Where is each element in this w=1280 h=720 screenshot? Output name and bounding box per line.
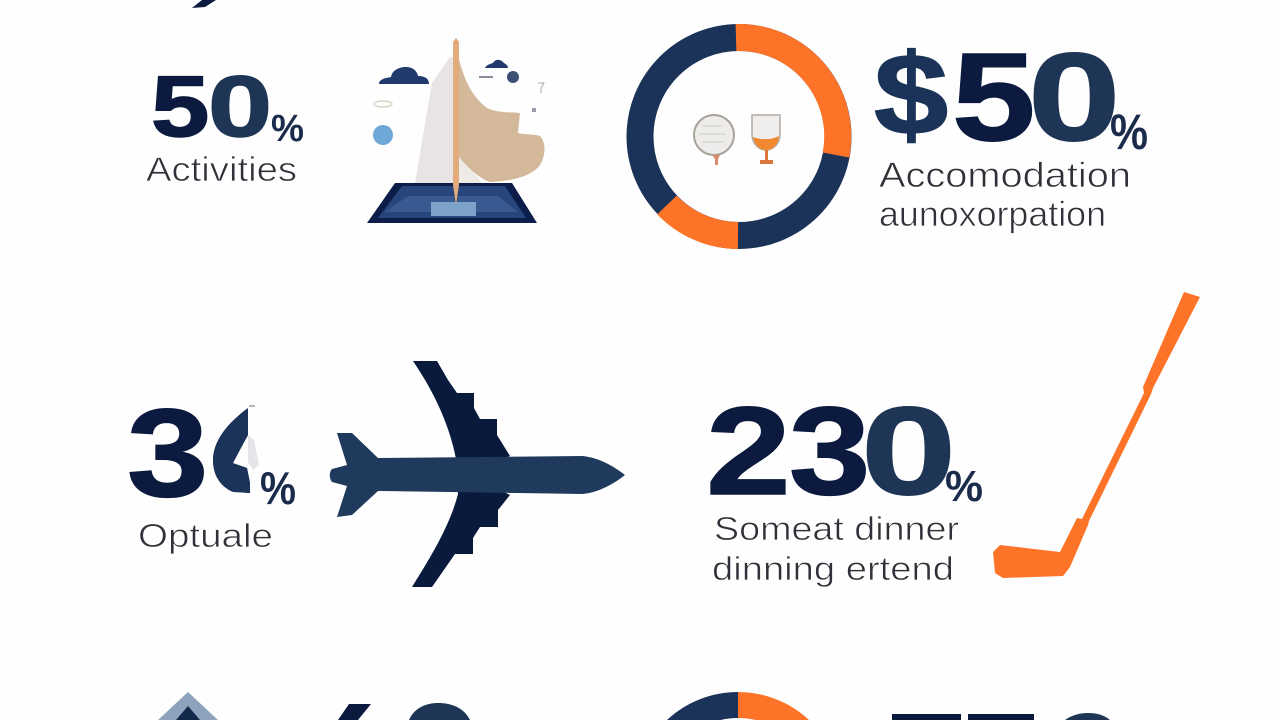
stat: $50% accommodation (874, 28, 1148, 234)
number: $50%: 5 (952, 28, 1035, 167)
number: 230%: 0 (861, 381, 956, 521)
icon: airplane (330, 361, 625, 587)
number: 750: 0 (1086, 714, 1090, 720)
icon: sailboat on blue base (367, 38, 544, 223)
icon: right tan sail (456, 50, 544, 182)
label: dinner line one: Someat dinner (714, 510, 959, 547)
number: $50% (874, 28, 1148, 167)
label: dinner line two: dinning ertend (712, 550, 954, 587)
fuselage and tail (330, 433, 625, 517)
number: 34%: 3 (127, 383, 208, 523)
stat: 34% optuale (129, 405, 295, 554)
number: 34% (129, 408, 295, 504)
icon: mast (453, 38, 459, 205)
donut chart (640, 37, 838, 236)
icon: house roof (158, 692, 218, 720)
bottom row, cut off by page edge (158, 692, 1110, 720)
cut-off digit at top edge (192, 0, 216, 8)
icon: clouds and sky details (373, 60, 544, 145)
number: 230%: 3 (789, 381, 870, 521)
sail scrap over digit (248, 405, 259, 470)
number: 60: 6 (350, 709, 355, 718)
label: accommodation: Accomodation (879, 156, 1131, 195)
number: 230%: % (945, 462, 983, 511)
icon: golf ball on tee (694, 115, 734, 165)
stat: 230% dinner (706, 381, 983, 587)
number: 50%: 0 (208, 58, 272, 155)
icon: lower sail highlight (456, 150, 482, 183)
number: $50%: % (1110, 104, 1148, 160)
label: optuale: Optuale (138, 517, 273, 554)
icon: wine glass (752, 115, 780, 164)
number: 50%: 5 (151, 59, 209, 155)
number: 230%: 2 (706, 381, 791, 521)
number: 50% (151, 58, 304, 155)
number: 60 (338, 703, 470, 720)
number: 60: 0 (434, 705, 441, 719)
icon: golf club (993, 292, 1200, 578)
number: 50%: % (271, 108, 304, 150)
number: $50%: 0 (1028, 28, 1120, 167)
icon: blue base (367, 183, 537, 223)
upper wing (413, 361, 510, 470)
number: 750: 5 (995, 703, 1003, 719)
stat: 50% activities (146, 58, 304, 189)
number: $50%: $ (874, 31, 948, 159)
number: 34%: % (260, 462, 296, 514)
number: 750 (892, 713, 1110, 720)
number: 34%: 4 (205, 384, 275, 523)
donut chart, partly visible (667, 692, 809, 720)
icon: left white sail (415, 57, 453, 183)
number: 230% (706, 381, 983, 521)
label: garbled second line: aunoxorpation (879, 195, 1106, 234)
number: 750: 7 (920, 703, 928, 719)
label: activities: Activities (146, 151, 297, 189)
lower wing (412, 480, 510, 587)
